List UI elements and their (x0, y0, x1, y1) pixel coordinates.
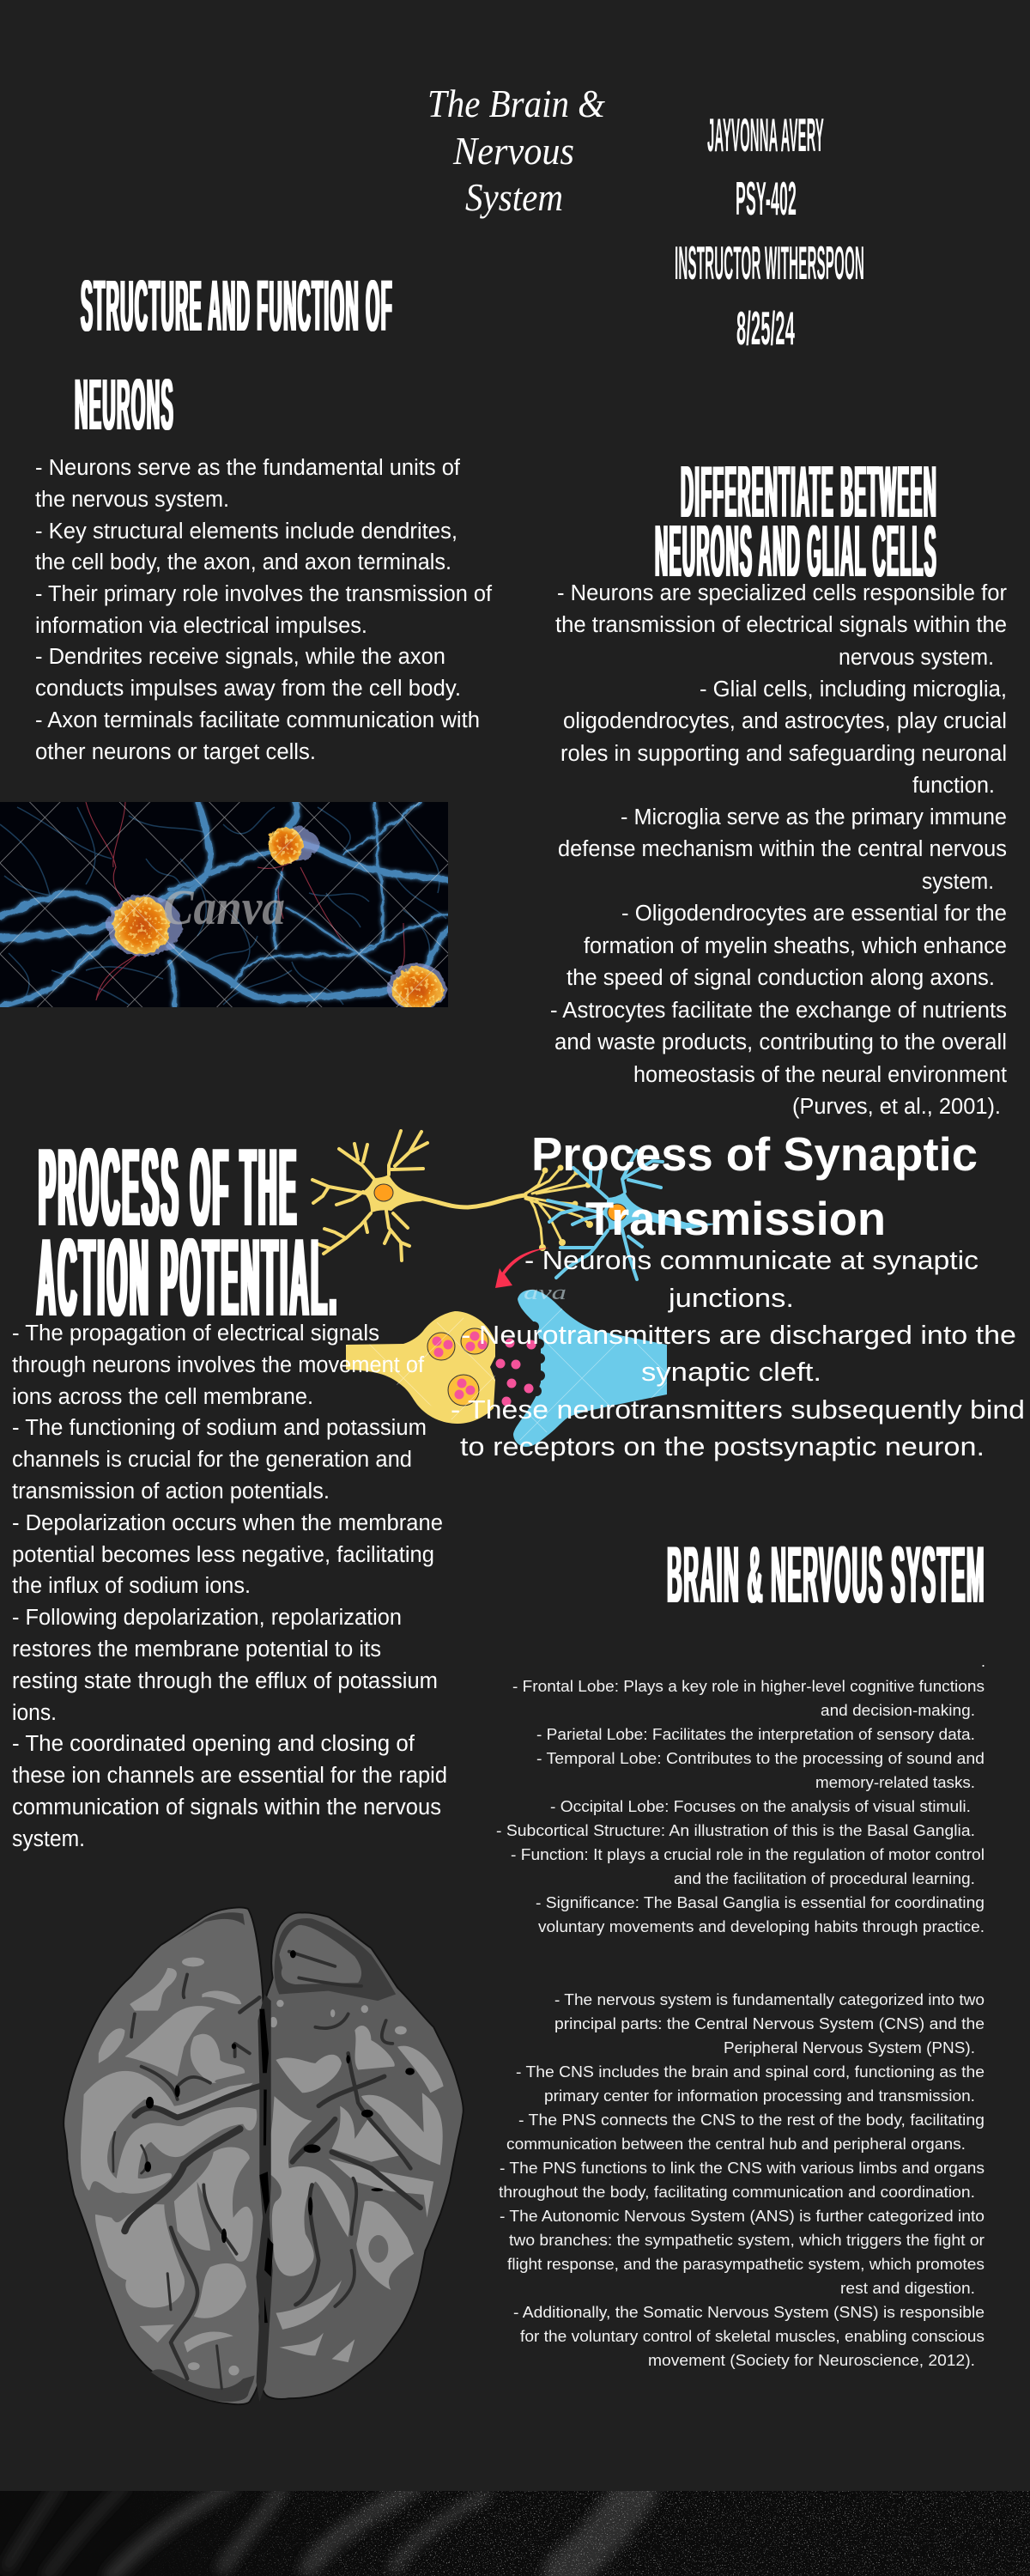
text block: action potential: - Following depolarization, repolarization (12, 1606, 402, 1630)
heading: process of the action potential (37, 1126, 339, 1340)
light gyri (81, 1958, 444, 2375)
text block: neuron structure: the nervous system. (35, 488, 229, 512)
text block: neuron structure: the cell body, the axon, and axon terminals. (35, 550, 451, 574)
text block: brain structures: - Temporal Lobe: Contributes to the processing of sound and (536, 1750, 985, 1767)
title: Nervous (452, 129, 574, 173)
text block: neurons versus glial cells: formation of myelin sheaths, which enhance (584, 934, 1007, 958)
text block: action potential: through neurons involves the movement of (12, 1353, 425, 1377)
illustration: two connected neurons (312, 1131, 719, 1279)
dark sulci (113, 1952, 421, 2389)
text block: neurons versus glial cells: (Purves, et al., 2001). (792, 1095, 1001, 1119)
bottom textured strip (0, 2486, 1030, 2576)
title (427, 82, 605, 219)
speckle (149, 2491, 1030, 2576)
text block: nervous system divisions: movement (Society for Neuroscience, 2012). (648, 2352, 975, 2369)
text block: neuron structure: - Neurons serve as the fundamental units of (35, 456, 461, 480)
text block: synaptic transmission: - These neurotransmitters subsequently bind (451, 1394, 1025, 1425)
darker lobes (151, 1912, 396, 2402)
text block: neurons versus glial cells: defense mechanism within the central nervous (558, 837, 1007, 861)
text block: neurons versus glial cells: nervous system. (839, 646, 994, 670)
text block: action potential: - Depolarization occurs when the membrane (12, 1511, 443, 1535)
text block: neuron structure: - Axon terminals facilitate communication with (35, 708, 480, 732)
heading: structure and function of neurons (75, 265, 393, 445)
text block: action potential: ions across the cell membrane. (12, 1385, 313, 1409)
cell body halos (106, 827, 446, 1012)
text block: nervous system divisions: - The nervous system is fundamentally categorized into two (554, 1991, 985, 2008)
text block: nervous system divisions: - The CNS includes the brain and spinal cord, functioning as the (516, 2063, 985, 2081)
text block: action potential: restores the membrane potential to its (12, 1637, 381, 1662)
text block: neurons versus glial cells: and waste products, contributing to the overall (554, 1030, 1007, 1054)
right hemisphere outline (259, 1912, 464, 2399)
text block: nervous system divisions: principal parts: the Central Nervous System (CNS) and the (554, 2015, 985, 2032)
image: glowing neurons photo (0, 802, 448, 1012)
text block: neuron structure: - Key structural elements include dendrites, (35, 519, 457, 544)
text block: neurons versus glial cells: system. (922, 870, 994, 894)
heading: differentiate between neurons and glial cells (655, 452, 937, 592)
text block: neurons versus glial cells: function. (912, 774, 995, 798)
presynaptic terminal (346, 1311, 495, 1424)
text block: nervous system divisions: primary center for information processing and transmission. (544, 2087, 975, 2105)
text block: neurons versus glial cells: the speed of signal conduction along axons. (566, 966, 995, 990)
text block: brain structures: - Subcortical Structure: An illustration of this is the Basal Ganglia. (496, 1822, 975, 1839)
canva watermark: Canva (163, 879, 285, 935)
text block: neurons versus glial cells: - Oligodendrocytes are essential for the (621, 902, 1007, 926)
text block: brain structures: - Frontal Lobe: Plays a key role in higher-level cognitive functions (512, 1678, 985, 1695)
faint diagram watermark: ava (524, 1282, 566, 1304)
text block: neuron structure: information via electrical impulses. (35, 614, 367, 638)
text block: action potential: the influx of sodium ions. (12, 1574, 251, 1598)
text block: nervous system divisions: - The PNS functions to link the CNS with various limbs and organs (500, 2160, 985, 2177)
title: The Brain & (427, 82, 605, 125)
text block: synaptic transmission: to receptors on the postsynaptic neuron. (460, 1431, 985, 1461)
text block: nervous system divisions: rest and digestion. (840, 2280, 975, 2297)
author and course details: PSY-402 (736, 173, 797, 225)
receptor bumps (529, 1321, 545, 1396)
text block: nervous system divisions: - The Autonomic Nervous System (ANS) is further categorized into (500, 2208, 985, 2225)
heading: process of synaptic transmission: Transmission (585, 1192, 886, 1245)
text block: nervous system divisions: Peripheral Nervous System (PNS). (724, 2039, 975, 2057)
text block: brain structures: - Function: It plays a crucial role in the regulation of motor control (511, 1846, 985, 1863)
blue neuron (548, 1151, 719, 1279)
illustration: brain from above (64, 1907, 464, 2404)
text block: neuron structure: - Dendrites receive signals, while the axon (35, 645, 445, 669)
text block: nervous system divisions: throughout the body, facilitating communication and coordination. (499, 2184, 975, 2201)
text block: synaptic transmission: - Neurotransmitters are discharged into the (461, 1320, 1016, 1350)
cell bodies (113, 827, 442, 1011)
heading: process of synaptic transmission (531, 1127, 978, 1245)
text block: neuron structure: other neurons or target cells. (35, 740, 316, 764)
author and course details (675, 109, 864, 355)
watermark lattice (0, 802, 448, 1007)
heading: structure and function of neurons: NEURONS (75, 364, 174, 445)
left hemisphere outline (64, 1907, 266, 2404)
text block: neurons versus glial cells: homeostasis of the neural environment (633, 1063, 1007, 1087)
central fissure (257, 1994, 273, 2402)
text block: nervous system divisions: - The PNS connects the CNS to the rest of the body, facilitating (518, 2111, 985, 2129)
text block: brain structures: - Occipital Lobe: Focuses on the analysis of visual stimuli. (550, 1798, 971, 1815)
text block: action potential: - The coordinated opening and closing of (12, 1732, 415, 1756)
text block: action potential: ions. (12, 1701, 57, 1725)
text block: action potential: system. (12, 1827, 85, 1851)
text block: neurons versus glial cells (550, 581, 1007, 1119)
text block: neurons versus glial cells: the transmission of electrical signals within the (555, 613, 1007, 637)
text block: neurons versus glial cells: roles in supporting and safeguarding neuronal (560, 742, 1007, 766)
hole in gyrus (368, 2235, 388, 2263)
text block: brain structures: and decision-making. (821, 1702, 975, 1719)
text block: synaptic transmission: - Neurons communicate at synaptic (524, 1245, 978, 1275)
text block: nervous system divisions: two branches: the sympathetic system, which triggers the fight or (509, 2232, 985, 2249)
vesicles (427, 1328, 488, 1406)
title: System (465, 175, 563, 219)
diagram watermark lattice (346, 1311, 495, 1424)
text block: action potential: communication of signals within the nervous (12, 1795, 441, 1820)
text block: neuron structure: conducts impulses away from the cell body. (35, 677, 461, 701)
text block: action potential: these ion channels are essential for the rapid (12, 1764, 447, 1788)
heading: process of synaptic transmission: Process of Synaptic (531, 1127, 978, 1181)
text block: neurons versus glial cells: - Microglia serve as the primary immune (621, 805, 1007, 829)
text block: synaptic transmission: synaptic cleft. (641, 1357, 821, 1387)
text block: neurons versus glial cells: oligodendrocytes, and astrocytes, play crucial (563, 709, 1007, 733)
arrow: red pointer to synapse (495, 1248, 549, 1288)
text block: neurons versus glial cells: - Astrocytes facilitate the exchange of nutrients (550, 999, 1007, 1023)
sand streaks (7, 2486, 637, 2576)
text block: nervous system divisions: flight response, and the parasympathetic system, which promotes (507, 2256, 985, 2273)
red fibres (86, 802, 404, 1000)
text block: brain structures: - Significance: The Basal Ganglia is essential for coordinating (536, 1894, 985, 1911)
neurotransmitter dots (433, 1331, 536, 1406)
text block: brain structures: voluntary movements and developing habits through practice. (538, 1918, 985, 1935)
author and course details: 8/25/24 (736, 302, 795, 355)
yellow neuron (312, 1131, 593, 1261)
faint background dendrites (0, 807, 446, 1005)
text block: brain structures (496, 1653, 985, 1935)
text block: action potential: channels is crucial for the generation and (12, 1448, 412, 1472)
soma speckle (112, 826, 443, 1010)
text block: synaptic transmission (451, 1245, 1025, 1461)
mid-grey top gyrus (279, 1925, 361, 1984)
text block: neurons versus glial cells: - Neurons are specialized cells responsible for (557, 581, 1007, 605)
text block: nervous system divisions (499, 1991, 985, 2369)
text block: action potential: potential becomes less negative, facilitating (12, 1543, 434, 1567)
text block: neuron structure: - Their primary role involves the transmission of (35, 582, 493, 606)
text block: neuron structure (35, 456, 493, 764)
text block: brain structures: . (981, 1653, 985, 1670)
text block: nervous system divisions: - Additionally, the Somatic Nervous System (SNS) is responsible (513, 2304, 985, 2321)
text block: brain structures: - Parietal Lobe: Facilitates the interpretation of sensory data. (536, 1726, 975, 1743)
text block: nervous system divisions: communication between the central hub and peripheral organs. (506, 2136, 966, 2153)
text block: synaptic transmission: junctions. (668, 1283, 794, 1313)
text block: neurons versus glial cells: - Glial cells, including microglia, (700, 677, 1007, 702)
text block: brain structures: memory-related tasks. (815, 1774, 975, 1791)
text block: action potential: - The propagation of electrical signals (12, 1321, 379, 1346)
text block: action potential (12, 1321, 447, 1851)
postsynaptic terminal (513, 1290, 667, 1447)
text block: action potential: transmission of action potentials. (12, 1479, 330, 1504)
illustration: synapse close-up (346, 1282, 667, 1447)
black spots (144, 1950, 415, 2243)
text block: nervous system divisions: for the voluntary control of skeletal muscles, enabling conscious (520, 2328, 985, 2345)
blue axons and dendrites (0, 802, 448, 1007)
text block: action potential: - The functioning of sodium and potassium (12, 1416, 427, 1440)
text block: action potential: resting state through the efflux of potassium (12, 1669, 438, 1693)
text block: brain structures: and the facilitation of procedural learning. (674, 1870, 975, 1887)
